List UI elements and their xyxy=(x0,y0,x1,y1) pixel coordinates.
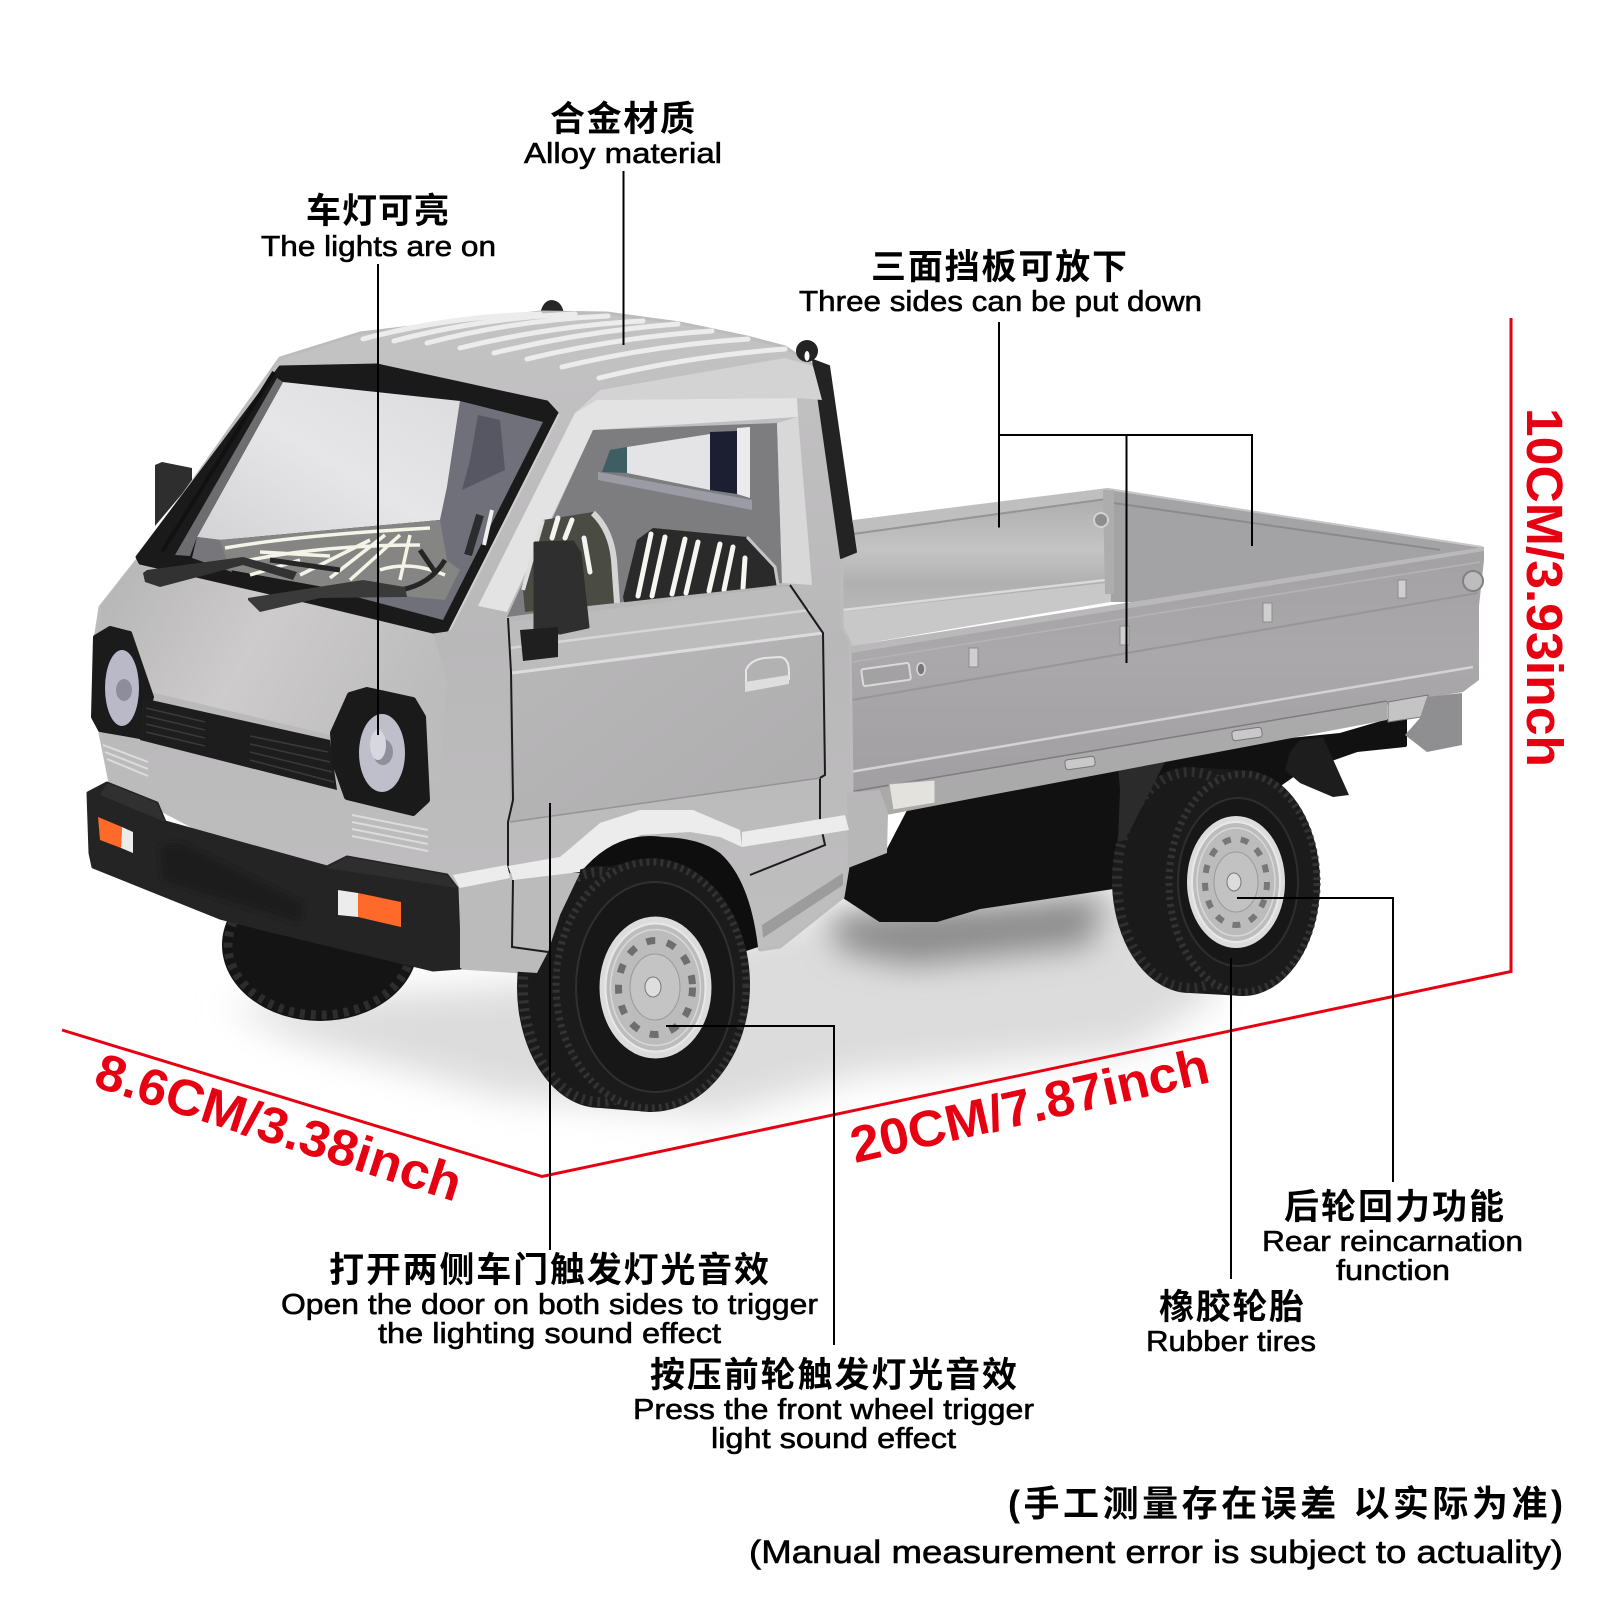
roof light band xyxy=(575,358,822,413)
callout: rear wheel xyxy=(1237,898,1523,1287)
door mirror xyxy=(520,542,588,661)
callout: lights xyxy=(261,192,496,735)
dashboard chrome xyxy=(220,520,460,600)
red dimension lines xyxy=(62,318,1511,1176)
grille xyxy=(140,698,337,790)
body corner in front of tyre xyxy=(460,873,580,973)
callout: door: Open the door on both sides to trigger xyxy=(281,1289,818,1321)
interior through glass xyxy=(330,401,543,620)
side vents xyxy=(103,745,428,851)
windshield xyxy=(137,365,557,632)
callout: front wheel xyxy=(633,1026,1034,1455)
rear knob xyxy=(1463,571,1483,591)
right seat xyxy=(623,528,778,606)
rail fittings xyxy=(889,693,1462,810)
interior seat glimpse xyxy=(484,510,492,545)
footnote: (手工测量存在误差 以实际为准) xyxy=(1008,1483,1563,1524)
callout: door: the lighting sound effect xyxy=(378,1318,721,1350)
left seat xyxy=(523,512,617,612)
corner post xyxy=(1103,490,1114,594)
dimension: length: 20CM/7.87inch xyxy=(845,1037,1214,1174)
glass xyxy=(197,382,460,540)
callout: three sides: 三面挡板可放下 xyxy=(871,248,1127,287)
front wheel xyxy=(517,858,750,1112)
side rail xyxy=(849,701,1387,820)
side trim strips xyxy=(453,810,849,888)
rear window xyxy=(627,434,710,490)
pillar behind window xyxy=(777,417,812,585)
wheel arch xyxy=(548,836,758,960)
footnote: (Manual measurement error is subject to actuality) xyxy=(749,1534,1563,1570)
callout: rear wheel: Rear reincarnation xyxy=(1262,1226,1523,1258)
rear cab section below bed xyxy=(847,790,888,868)
far wall inside xyxy=(1111,497,1484,602)
left indicator xyxy=(98,817,122,848)
lower glass corner xyxy=(192,537,232,572)
dimension: height: 10CM/3.93inch xyxy=(1516,408,1573,767)
truck model xyxy=(88,300,1484,1112)
rear fender xyxy=(1118,762,1165,842)
callout: three sides xyxy=(799,248,1252,663)
front face panel xyxy=(100,560,447,800)
roof knob xyxy=(540,300,564,314)
wipers xyxy=(143,557,297,587)
callout: door: 打开两侧车门触发灯光音效 xyxy=(329,1251,769,1290)
floor shadow xyxy=(225,885,1225,1115)
rear wheel xyxy=(1112,767,1320,996)
front wall inside xyxy=(840,488,1108,625)
right indicator xyxy=(338,890,358,917)
callout: lights: The lights are on xyxy=(261,231,496,263)
side panel xyxy=(848,547,1484,792)
left headlight xyxy=(93,628,152,737)
A pillar outer edge xyxy=(450,414,559,630)
door window opening xyxy=(507,417,812,617)
cab body xyxy=(95,312,852,973)
rear mud flap xyxy=(1285,737,1349,797)
bed hinge xyxy=(861,663,925,686)
front bumper xyxy=(88,783,460,970)
left mirror xyxy=(155,462,192,526)
callout: lights: 车灯可亮 xyxy=(306,192,449,231)
callout: rear wheel: function xyxy=(1336,1255,1450,1287)
cargo bed xyxy=(840,488,1484,820)
right headlight xyxy=(333,690,427,813)
chassis underside xyxy=(845,716,1405,920)
callout: rubber tires: Rubber tires xyxy=(1146,1326,1316,1358)
callout: front wheel: 按压前轮触发灯光音效 xyxy=(650,1356,1017,1395)
roof ribs xyxy=(363,314,785,378)
dimension: width: 8.6CM/3.38inch xyxy=(89,1042,469,1212)
callout: rubber tires: 橡胶轮胎 xyxy=(1159,1288,1304,1327)
footnote xyxy=(749,1483,1563,1570)
far front tyre xyxy=(222,869,418,1021)
callout: front wheel: Press the front wheel trigger xyxy=(633,1394,1034,1426)
A pillar highlight xyxy=(478,398,798,612)
callout: rear wheel: 后轮回力功能 xyxy=(1284,1188,1504,1227)
rear cab strip xyxy=(796,340,856,558)
callout: alloy material: Alloy material xyxy=(524,138,722,170)
callout: door xyxy=(281,803,818,1350)
callout: front wheel: light sound effect xyxy=(711,1423,956,1455)
frame inner xyxy=(175,378,283,556)
bed floor xyxy=(840,583,1157,646)
door handle xyxy=(745,657,789,692)
callout: rubber tires xyxy=(1146,958,1316,1358)
rocker band xyxy=(762,873,843,938)
callout: alloy material: 合金材质 xyxy=(550,100,695,139)
callout: three sides: Three sides can be put down xyxy=(799,286,1202,318)
front door xyxy=(508,585,825,952)
callout: alloy material xyxy=(524,100,722,345)
side pins xyxy=(969,580,1406,667)
